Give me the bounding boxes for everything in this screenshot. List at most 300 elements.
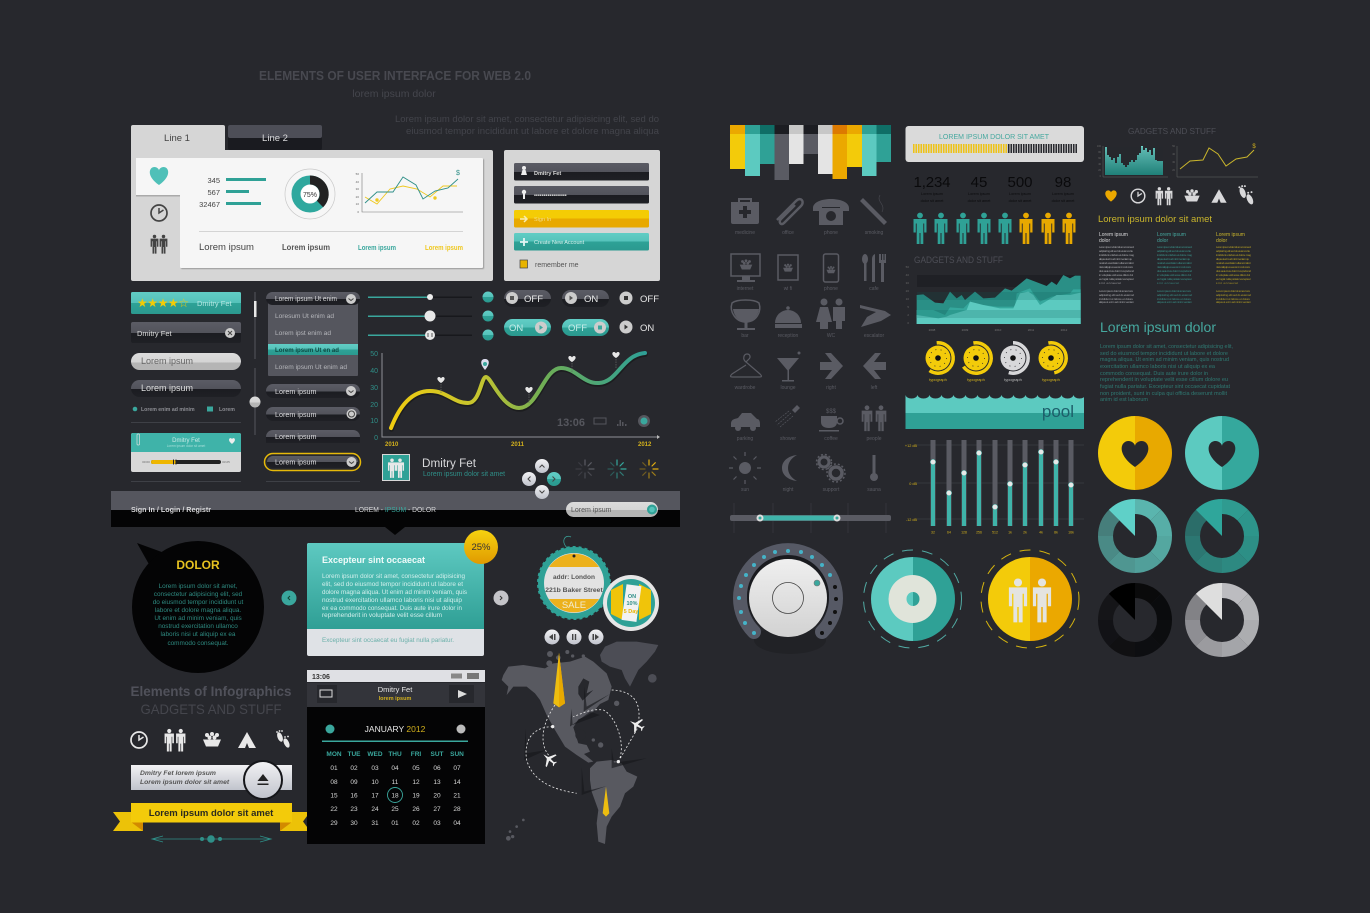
- big numbers: [914, 174, 1075, 203]
- day grid: 29: [330, 820, 338, 827]
- phone: [813, 199, 849, 236]
- day grid: 14: [453, 779, 461, 786]
- big numbers: Lorem ipsum: [1009, 192, 1031, 196]
- big numbers: Lorem ipsum: [968, 192, 990, 196]
- toggle switches: ON: [640, 323, 654, 334]
- calendar body: [307, 707, 485, 844]
- curve line chart: [370, 351, 660, 448]
- parking: [731, 413, 760, 442]
- small bar chart: [1097, 145, 1168, 178]
- area chart: 2008: [929, 328, 936, 332]
- equalizer: 256: [976, 530, 982, 534]
- discount badge: 5 Day: [624, 609, 639, 615]
- toggle switches: OFF: [524, 294, 543, 305]
- toggle switches: ON: [584, 294, 598, 305]
- curve line chart: 40: [370, 368, 378, 375]
- north america: [502, 657, 612, 763]
- speech bubble: consectetur adipisicing elit, sed: [154, 591, 243, 598]
- sale tag badge: [538, 536, 610, 619]
- area chart: 2009: [962, 328, 969, 332]
- reception: reception: [778, 333, 798, 339]
- icon row 2: [1105, 185, 1255, 205]
- media controls: [544, 630, 604, 644]
- tab: line 2: [228, 125, 322, 150]
- shower: shower: [780, 436, 796, 442]
- name field: [131, 322, 241, 343]
- speech bubble: Ut enim ad minim veniam, quis: [154, 615, 242, 622]
- dropdown buttons: Lorem ipsum: [275, 387, 317, 396]
- column 3: dolor: [1216, 238, 1227, 244]
- equalizer: 2k: [1023, 530, 1027, 534]
- progress panel: [906, 126, 1084, 162]
- light pill: Lorem ipsum: [141, 356, 193, 366]
- dashboard labels: Lorem ipsum: [199, 242, 254, 253]
- world map: [502, 642, 658, 844]
- toggle switches: ON: [509, 323, 523, 334]
- teal info card: Excepteur sint occaecat eu fugiat nulla pariatur.: [322, 638, 454, 644]
- column 1: adipisicing elit sed do eiusmod te: [1099, 249, 1133, 253]
- column 2: duis aute irure dolor in reprehend: [1157, 269, 1192, 273]
- stats bars: 32467: [199, 200, 220, 209]
- rating bar: Dmitry Fet: [197, 299, 232, 308]
- day grid: 04: [453, 820, 461, 827]
- panel: tabbed dashboard: [131, 125, 493, 281]
- column 1: [1099, 232, 1135, 304]
- line chart: [356, 170, 463, 214]
- profile widget: Lorem ipsum dolor sit amet: [423, 471, 505, 478]
- equalizer: 0 dB: [909, 482, 917, 486]
- day grid: 03: [371, 765, 379, 772]
- name field: Dmitry Fet: [137, 329, 172, 338]
- paragraph: [1100, 344, 1233, 403]
- icon: clock: [151, 205, 167, 221]
- dropdown buttons: Lorem ipsum: [275, 410, 317, 419]
- left control column: [131, 292, 241, 482]
- day grid: 09: [350, 779, 358, 786]
- day grid: 04: [391, 765, 399, 772]
- paragraph: Lorem ipsum dolor sit amet, consectetur adipisicing elit,: [1100, 344, 1233, 350]
- small bar chart: 80: [1098, 151, 1102, 154]
- ring chart grey: [1185, 583, 1259, 657]
- dropdown menu: Lorem ipsum Ut en ad: [275, 347, 339, 354]
- dropdown menu: Lorem ipsum Ut enim: [275, 294, 337, 303]
- day grid: 10: [371, 779, 379, 786]
- month title: JANUARY 2012: [365, 724, 426, 734]
- day grid: 02: [350, 765, 358, 772]
- player header: lorem ipsum: [379, 696, 411, 702]
- people: [862, 405, 886, 442]
- area chart: 5: [907, 305, 909, 309]
- paragraph: magna aliqua. Ut enim ad minim veniam, quis nostrud: [1100, 357, 1229, 363]
- vertical sliders: [250, 292, 260, 435]
- day grid: 01: [330, 765, 338, 772]
- column 1: Lorem ipsum dolor sit amet cons: [1099, 289, 1134, 293]
- remember me: remember me: [535, 262, 579, 269]
- profile widget: [382, 454, 505, 480]
- heading: gadgets: GADGETS AND STUFF: [914, 255, 1003, 265]
- day grid: 30: [350, 820, 358, 827]
- flight routes: [526, 690, 639, 793]
- teal info card: ex ea commodo consequat. Duis aute irure dolor in: [322, 605, 462, 612]
- weekday row: SUT: [430, 751, 444, 758]
- line chart: 30: [356, 187, 359, 191]
- calendar widget: [307, 670, 485, 844]
- ring chart dark teal: [1185, 499, 1259, 573]
- password field: [514, 186, 649, 204]
- cafe: cafe: [869, 286, 879, 292]
- sun: sun: [741, 487, 749, 493]
- area chart: 10: [906, 297, 909, 301]
- column 1: aliqua ut enim ad minim veniam: [1099, 300, 1135, 304]
- day grid: 01: [391, 820, 399, 827]
- column 2: [1157, 232, 1193, 304]
- small line chart: 40: [1172, 153, 1176, 156]
- music player card: [131, 433, 241, 472]
- wardrobe: wardrobe: [735, 385, 756, 391]
- music player card: 00:00: [142, 460, 150, 464]
- big numbers: 45: [971, 174, 987, 191]
- badge 25%: 25%: [471, 542, 491, 553]
- speech bubble: [132, 541, 264, 673]
- weekday row: FRI: [411, 751, 421, 758]
- column 2: adipisicing elit sed do eiusmod te: [1157, 249, 1191, 253]
- area chart: 40: [906, 273, 909, 277]
- map pins: [553, 653, 609, 817]
- big numbers: dolor sit amet: [1009, 199, 1032, 203]
- greenland and north canada: [600, 642, 658, 687]
- small bar chart: 40: [1098, 163, 1102, 166]
- left arrow: left: [871, 385, 878, 391]
- music player card: Dmitry Fet: [172, 438, 200, 444]
- WC: WC: [827, 333, 836, 339]
- phone: phone: [824, 230, 838, 236]
- typograph dials: typograph: [1004, 377, 1022, 382]
- panel: login form: [504, 150, 660, 281]
- section heading: infographics: [130, 683, 292, 717]
- day grid: 20: [433, 792, 441, 800]
- status bar: [307, 670, 485, 682]
- office: office: [782, 230, 794, 236]
- speech bubble: laboris nisi ut aliquip ex ea: [161, 631, 236, 638]
- equalizer: +12 dB: [905, 444, 917, 448]
- area chart: 20: [906, 289, 909, 293]
- day grid: 18: [391, 792, 399, 800]
- weekday row: MON: [326, 751, 342, 758]
- teal info card: reprehenderit in voluptate velit esse cillum: [322, 612, 442, 619]
- dropdown buttons: Lorem ipsum: [275, 432, 317, 441]
- small line chart: $: [1252, 144, 1256, 150]
- white content: [180, 158, 483, 268]
- column 3: adipisicing elit sed do eiusmod: [1216, 293, 1251, 297]
- day grid: 08: [330, 779, 338, 786]
- radio labels: Lorem: [219, 407, 235, 413]
- profile widget: Dmitry Fet: [422, 458, 477, 470]
- paragraph: fugiat nulla pariatur. Excepteur sint occaecat cupidatat: [1100, 384, 1231, 390]
- yellow people disc: [981, 550, 1079, 648]
- section heading: infographics: Elements of Infographics: [130, 683, 292, 699]
- stats bars: [199, 176, 266, 209]
- toggle switches: OFF: [640, 294, 659, 305]
- curve line chart: 2011: [511, 442, 525, 448]
- night: [782, 455, 797, 493]
- day grid: 07: [453, 765, 461, 772]
- column 2: incididunt ut labore et dolore: [1157, 297, 1191, 301]
- player header: Dmitry Fet: [378, 685, 413, 694]
- column 1: sint occaecat: [1099, 281, 1121, 285]
- badge 25%: [464, 530, 498, 564]
- weekday row: THU: [388, 751, 402, 758]
- equalizer: -12 dB: [906, 518, 917, 522]
- teal target disc: [864, 550, 962, 648]
- night: night: [783, 487, 794, 493]
- username field: Dmitry Fet: [534, 171, 561, 177]
- column 1: incididunt ut labore et dolore: [1099, 297, 1133, 301]
- people: people: [866, 436, 882, 442]
- column 3: nostrud exercitation ullamco labor: [1216, 261, 1251, 265]
- teal info card: [282, 530, 508, 656]
- prev arrow: [282, 590, 296, 606]
- smoking: smoking: [865, 230, 884, 236]
- search pill: Lorem ipsum: [571, 507, 612, 514]
- eject bar: [131, 761, 292, 799]
- area chart: 2011: [1028, 328, 1035, 332]
- intro text: Lorem ipsum dolor sit amet, consectetur adipisicing elit, sed do: [395, 114, 659, 124]
- area chart: 0: [907, 321, 909, 325]
- day grid: 17: [371, 792, 379, 800]
- dropdown menu: [266, 292, 360, 376]
- day grid: 26: [412, 806, 420, 813]
- speech bubble: nostrud exercitation ullamco: [158, 623, 238, 630]
- loading spinners: [576, 460, 658, 478]
- support: support: [823, 487, 840, 493]
- small line chart: 30: [1172, 161, 1176, 164]
- intro text: eiusmod tempor incididunt ut labore et dolore magna aliqua: [406, 126, 660, 136]
- color bar chart: [730, 125, 891, 180]
- map shadows: [524, 687, 647, 795]
- tab: line 1: [131, 125, 225, 155]
- internet: [731, 254, 760, 292]
- title: ELEMENTS OF USER INTERFACE FOR WEB 2.0: [259, 68, 531, 83]
- line chart: 10: [356, 202, 359, 206]
- tab: line 1: Line 1: [164, 133, 190, 144]
- phone 2: phone: [824, 286, 838, 292]
- column 2: eu fugiat nulla pariatur excepteur: [1157, 277, 1192, 281]
- create account button: [514, 233, 649, 250]
- stats bars: 345: [207, 176, 220, 185]
- navigation bar: [111, 491, 680, 535]
- area chart: 50: [906, 265, 909, 269]
- music player card: Lorem ipsum dolor sit amet: [167, 444, 205, 448]
- password field: •••••••••••••••••: [534, 193, 567, 199]
- white tab: [136, 158, 186, 196]
- dropdown buttons: [264, 384, 360, 482]
- column 3: Lorem ipsum dolor sit amet cons: [1216, 289, 1251, 293]
- toggle switches: [504, 290, 659, 336]
- dropdown menu: Lorem ipst enim ad: [275, 330, 331, 337]
- big numbers: Lorem ipsum: [1052, 192, 1074, 196]
- equalizer: 64: [947, 530, 951, 534]
- day grid: 24: [371, 806, 379, 813]
- dropdown buttons: Lorem ipsum: [275, 458, 317, 466]
- WC: [816, 298, 845, 339]
- support: [816, 454, 845, 493]
- dashboard labels: Lorem ipsum: [282, 242, 330, 252]
- status readout: [557, 415, 650, 429]
- dark pill: [131, 380, 241, 397]
- title: [259, 68, 531, 100]
- line chart: 40: [356, 180, 359, 184]
- equalizer: 8k: [1054, 530, 1058, 534]
- pool banner: [906, 394, 1086, 429]
- area chart: 2012: [1061, 328, 1068, 332]
- day grid: 13: [433, 779, 441, 786]
- big numbers: dolor sit amet: [1052, 199, 1075, 203]
- small bar chart: 20: [1098, 169, 1102, 172]
- medicine: medicine: [735, 230, 755, 236]
- day grid: 05: [412, 765, 420, 772]
- escalator: escalator: [864, 333, 884, 339]
- weekday row: [326, 751, 464, 758]
- big numbers: dolor sit amet: [921, 199, 944, 203]
- donut chart: [285, 169, 335, 219]
- medicine: [731, 198, 759, 236]
- icon: heart: [150, 167, 168, 185]
- day grid: 19: [412, 792, 420, 800]
- heading: gadgets 2: GADGETS AND STUFF: [1128, 126, 1216, 136]
- column 3: in voluptate velit esse cillum dol: [1216, 273, 1250, 277]
- discount badge: [603, 575, 659, 631]
- dropdown menu: Lorem ipsum Ut enim ad: [275, 364, 347, 371]
- equalizer: 16k: [1068, 530, 1074, 534]
- dashboard labels: Lorem ipsum: [358, 245, 396, 252]
- speech bubble: Lorem ipsum dolor sit amet,: [159, 583, 238, 590]
- speech bubble: labore et dolore magna aliqua.: [155, 607, 241, 614]
- right arrow: [820, 353, 843, 391]
- column 1: eu fugiat nulla pariatur excepteur: [1099, 277, 1134, 281]
- teal info card: nostrud exercitation ullamco laboris nisi ut aliquip: [322, 597, 463, 604]
- speech bubble: do eiusmod tempor incididunt ut: [153, 599, 244, 606]
- big numbers: 500: [1007, 174, 1033, 191]
- phone 2: [824, 254, 838, 292]
- column 1: nostrud exercitation ullamco labor: [1099, 261, 1134, 265]
- speech bubble: commodo consequat.: [167, 640, 229, 647]
- discount badge: 10%: [626, 601, 638, 607]
- small bar chart: 100: [1097, 145, 1102, 148]
- sale tag badge: SALE: [562, 600, 586, 611]
- teal info card: Lorem ipsum dolor sit amet, consectetur adipisicing: [322, 573, 465, 580]
- line chart: 0: [357, 210, 359, 214]
- curve line chart: 30: [370, 385, 378, 392]
- shower: [775, 405, 800, 442]
- day grid: 16: [350, 792, 358, 800]
- column 1: nisi ut aliquip ex ea commodo cons: [1099, 265, 1134, 269]
- day grid: 06: [433, 765, 441, 772]
- column 3: incididunt ut labore et dolore: [1216, 297, 1250, 301]
- radio labels: [133, 406, 235, 413]
- weekday row: SUN: [450, 751, 464, 758]
- column 1: Lorem ipsum dolor sit amet consect: [1099, 245, 1134, 249]
- bar: [731, 300, 760, 339]
- column 2: nisi ut aliquip ex ea commodo cons: [1157, 265, 1192, 269]
- teal info card: dolore magna aliqua. Ut enim ad minim veniam, quis: [322, 589, 467, 596]
- next arrow: [494, 590, 508, 606]
- sun: [729, 452, 761, 493]
- small bar chart: 0: [1100, 175, 1102, 178]
- escalator: [860, 305, 891, 339]
- column 2: Lorem ipsum dolor sit amet consect: [1157, 245, 1192, 249]
- column 1: aliqua ut enim ad minim veniam qu: [1099, 257, 1132, 261]
- paragraph: reprehenderit in voluptate velit esse cillum dolore eu: [1100, 377, 1228, 383]
- remember me: [520, 260, 579, 269]
- typograph dials: typograph: [1042, 377, 1060, 382]
- day grid: 22: [330, 806, 338, 813]
- eject bar: Dmitry Fet lorem ipsum: [140, 770, 216, 777]
- column 1: dolor: [1099, 238, 1110, 244]
- status bar: 13:06: [312, 674, 330, 681]
- cafe: [862, 254, 886, 292]
- eject bar: Lorem ipsum dolor sit amet: [140, 779, 230, 786]
- curve line chart: 0: [374, 435, 378, 442]
- section heading: infographics: GADGETS AND STUFF: [140, 701, 282, 717]
- title: lorem ipsum dolor: [352, 88, 436, 100]
- curve line chart: 20: [370, 402, 378, 409]
- dropdown menu: Loresum Ut enim ad: [275, 313, 334, 320]
- paragraph: non proident, sunt in culpa qui officia deserunt mollit: [1100, 391, 1228, 397]
- sauna: sauna: [867, 487, 881, 493]
- hudson bay: [578, 678, 593, 701]
- column 2: dolor: [1157, 238, 1168, 244]
- column 3: sint occaecat: [1216, 281, 1238, 285]
- curve line chart: 50: [370, 351, 378, 358]
- day grid: 21: [453, 792, 461, 800]
- ring chart black: [1098, 583, 1172, 657]
- column 2: in voluptate velit esse cillum dol: [1157, 273, 1191, 277]
- donut chart: 75%: [303, 192, 317, 199]
- column 2: Lorem ipsum dolor sit amet cons: [1157, 289, 1192, 293]
- text columns: [1099, 232, 1252, 304]
- day grid: 02: [412, 820, 420, 827]
- day grid: 15: [330, 792, 338, 800]
- ring chart light teal: [1098, 499, 1172, 573]
- rating bar: [131, 292, 241, 314]
- area chart: 2: [907, 313, 909, 317]
- line chart: 50: [356, 172, 359, 176]
- tab: line 2: Line 2: [262, 133, 288, 144]
- sale tag badge: addr: London: [553, 574, 595, 581]
- column 2: Lorem ipsum: [1157, 232, 1186, 238]
- big numbers: dolor sit amet: [968, 199, 991, 203]
- paragraph: commodo consequat. Duis aute irure dolor in: [1100, 371, 1208, 377]
- curve line chart: 10: [370, 418, 378, 425]
- sign in button: [514, 210, 649, 228]
- teal info card: Excepteur sint occaecat: [322, 555, 425, 565]
- day grid: 11: [392, 779, 399, 786]
- dashboard card: [131, 150, 493, 281]
- username field: [514, 163, 649, 180]
- column 1: in voluptate velit esse cillum dol: [1099, 273, 1133, 277]
- progress panel: LOREM IPSUM DOLOR SIT AMET: [939, 132, 1049, 141]
- column 1: adipisicing elit sed do eiusmod: [1099, 293, 1134, 297]
- typograph dials: typograph: [929, 377, 947, 382]
- pool banner: pool: [1042, 402, 1074, 421]
- column 1: duis aute irure dolor in reprehend: [1099, 269, 1134, 273]
- paragraph: exercitation ullamco laboris nisi ut aliquip ex ea: [1100, 364, 1215, 370]
- reception: [775, 306, 802, 339]
- right arrow: right: [826, 385, 836, 391]
- sauna: [867, 455, 881, 493]
- day grid: 23: [350, 806, 358, 813]
- curve line chart: 2010: [385, 442, 399, 448]
